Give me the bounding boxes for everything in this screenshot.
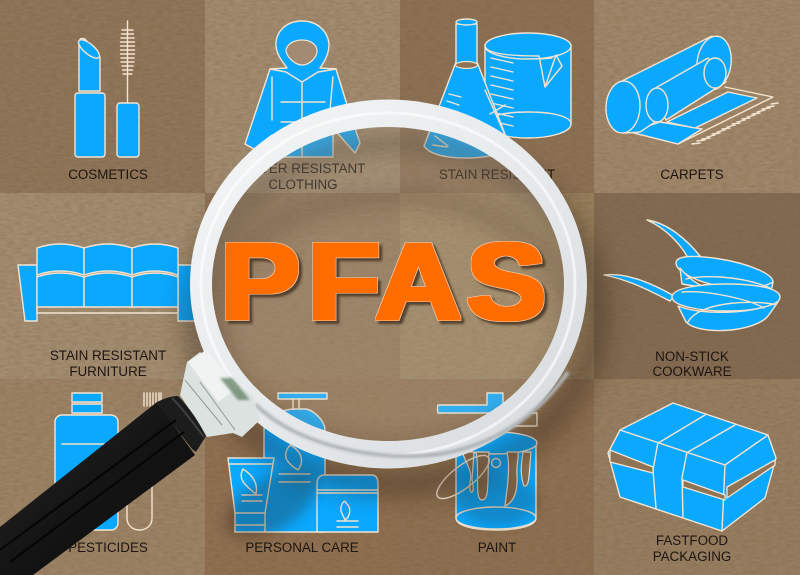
label: packaging: PACKAGING <box>653 549 731 564</box>
label: water resistant clothing: WATER RESISTANT <box>241 161 365 176</box>
icon: pesticide bottle and tube <box>55 393 161 530</box>
label: fastfood packaging: FASTFOOD <box>656 533 728 548</box>
icon: personal care products <box>228 393 378 532</box>
label: carpets: CARPETS <box>660 167 724 182</box>
label: cosmetics: COSMETICS <box>68 167 148 182</box>
label: cookware: COOKWARE <box>652 364 732 379</box>
icon: sofa <box>18 244 200 321</box>
label: paint: PAINT <box>478 540 516 555</box>
magnifier cast shadow <box>196 144 596 553</box>
icon: carpet roll <box>605 34 778 144</box>
magnifier black handle <box>0 396 206 575</box>
icon: hooded jacket <box>245 21 360 157</box>
icon: non-stick pans <box>604 220 780 331</box>
magnifying lens glass <box>212 127 570 450</box>
label: stain resistant: STAIN RESISTANT <box>439 167 555 182</box>
label: pesticides: PESTICIDES <box>68 540 148 555</box>
PFAS heading: PFAS <box>221 221 546 343</box>
label: furniture: FURNITURE <box>69 364 147 379</box>
icon: flask and beaker <box>424 19 571 158</box>
label: stain resistant furniture: STAIN RESISTANT <box>50 348 166 363</box>
label: personal care: PERSONAL CARE <box>245 540 359 555</box>
icon: lipstick and mascara <box>75 21 139 157</box>
magnifier rim <box>190 100 587 468</box>
magnifier metal collar <box>180 350 260 437</box>
label: clothing: CLOTHING <box>268 177 338 192</box>
icon: fastfood packaging box <box>608 403 776 531</box>
label: non-stick cookware: NON-STICK <box>655 349 729 364</box>
icon: paint can <box>431 393 537 530</box>
